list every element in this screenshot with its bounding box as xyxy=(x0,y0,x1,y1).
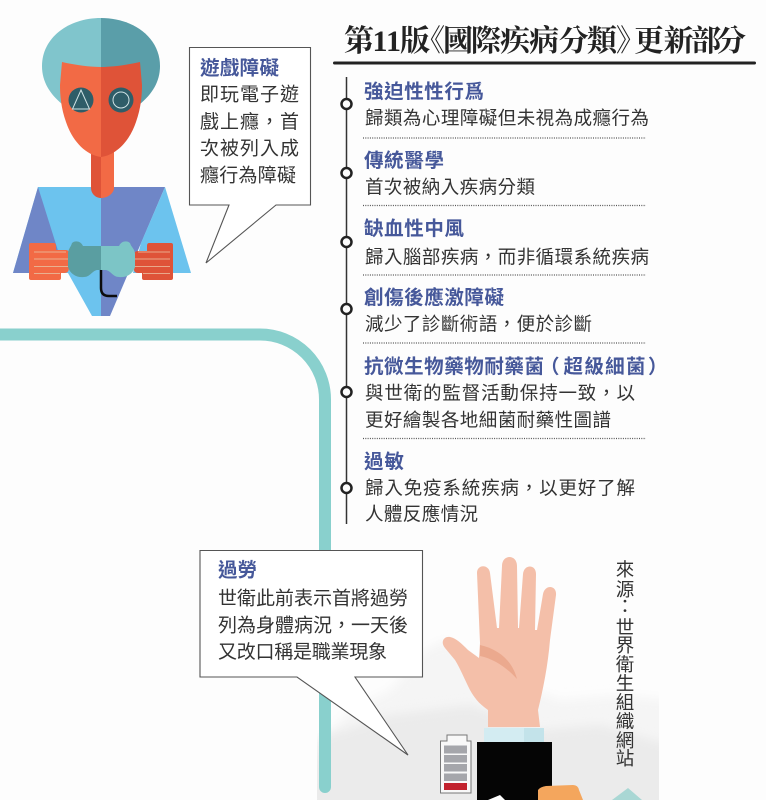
timeline xyxy=(342,77,352,524)
item: allergy: 人體反應情況 xyxy=(365,504,478,524)
item: allergy: 歸入免疫系統疾病，以更好了解 xyxy=(365,478,635,498)
hair xyxy=(42,18,160,104)
source credit: 織 xyxy=(616,711,634,732)
source credit: 界 xyxy=(616,635,634,656)
right hand xyxy=(134,243,173,280)
item: antimicrobial resistance: （ xyxy=(540,356,560,378)
callout text: 次被列入成 xyxy=(200,138,299,160)
eye: circle xyxy=(108,88,134,112)
title: 更 xyxy=(634,25,664,58)
title: 版 xyxy=(400,25,430,58)
shirt cuff xyxy=(484,728,544,742)
title: 國 xyxy=(443,25,473,58)
title: 類 xyxy=(587,25,619,58)
neck xyxy=(91,150,114,198)
title: 際 xyxy=(471,25,503,58)
title: 1 xyxy=(372,25,388,58)
callout text: 戲上癮，首 xyxy=(200,111,299,133)
item: antimicrobial resistance: 超級細菌 xyxy=(564,356,646,378)
item: PTSD: 減少了診斷術語，便於診斷 xyxy=(365,314,592,334)
arm sleeve xyxy=(477,742,552,800)
item: PTSD: 創傷後應激障礙 xyxy=(364,286,504,309)
callout text: 又改口稱是職業現象 xyxy=(218,641,387,663)
item: ischemic stroke: 缺血性中風 xyxy=(364,218,464,240)
heading: burnout: 過勞 xyxy=(218,560,257,582)
eye: triangle xyxy=(68,88,94,112)
item: antimicrobial resistance: 抗微生物藥物耐藥菌 xyxy=(364,355,544,378)
game controller xyxy=(68,241,135,277)
item: traditional medicine: 傳統醫學 xyxy=(364,150,444,172)
item: allergy: 過敏 xyxy=(364,451,404,473)
title: 》 xyxy=(616,25,646,58)
icon: low battery xyxy=(440,735,471,793)
source credit: 來 xyxy=(616,559,634,580)
source credit: 網 xyxy=(616,730,634,751)
source credit: 組 xyxy=(616,692,634,713)
callout text xyxy=(218,588,408,663)
grey brush background xyxy=(317,694,659,800)
item: PTSD xyxy=(364,286,592,334)
teal connector line xyxy=(0,334,325,787)
title: 新 xyxy=(664,25,694,58)
source credit: 源 xyxy=(616,579,634,600)
title rule xyxy=(333,62,756,64)
title: 分 xyxy=(558,25,588,58)
item: antimicrobial resistance: ） xyxy=(648,356,668,378)
title: 分 xyxy=(716,25,746,58)
source credit: 生 xyxy=(616,673,634,694)
hand xyxy=(443,557,556,727)
source credit: 衛 xyxy=(616,654,634,675)
item: antimicrobial resistance: 更好繪製各地細菌耐藥性圖譜 xyxy=(365,410,611,430)
illustration: raised hand xyxy=(443,557,642,800)
source credit: 世 xyxy=(616,617,634,638)
left hand xyxy=(29,243,69,280)
title: 1 xyxy=(386,25,401,58)
item: OCD: 強迫性性行爲 xyxy=(364,81,484,103)
cable xyxy=(101,270,117,296)
body xyxy=(13,187,191,316)
callout text: 即玩電子遊 xyxy=(200,84,299,106)
teal shape xyxy=(612,788,642,800)
heading: gaming disorder: 遊戲障礙 xyxy=(200,56,279,80)
callout text: 癮行為障礙 xyxy=(200,164,296,186)
callout text: 世衛此前表示首將過勞 xyxy=(218,588,408,610)
item: OCD xyxy=(364,81,649,128)
item: traditional medicine: 首次被納入疾病分類 xyxy=(365,176,535,198)
callout: gaming disorder xyxy=(190,48,310,263)
face xyxy=(60,62,142,157)
source credit: ： xyxy=(616,596,634,617)
callout: burnout xyxy=(200,550,422,755)
item: antimicrobial resistance: 與世衛的監督活動保持一致，以 xyxy=(365,382,635,404)
white shape at sleeve xyxy=(488,795,505,800)
illustration: gamer figure xyxy=(13,18,191,316)
title: 部 xyxy=(691,25,721,58)
title: 病 xyxy=(529,25,559,58)
item: OCD: 歸類為心理障礙但未視為成癮行為 xyxy=(365,108,649,128)
title: 《 xyxy=(415,25,445,58)
orange envelope shape xyxy=(538,785,583,800)
title: 疾 xyxy=(500,25,532,58)
item: ischemic stroke xyxy=(364,218,649,268)
palm crease xyxy=(480,645,517,679)
callout text xyxy=(200,84,299,186)
title: 第 xyxy=(344,25,374,58)
item: allergy xyxy=(364,451,635,524)
source credit: 站 xyxy=(616,748,634,769)
item: ischemic stroke: 歸入腦部疾病，而非循環系統疾病 xyxy=(365,246,649,268)
item: traditional medicine xyxy=(364,150,535,198)
callout text: 列為身體病況，一天後 xyxy=(218,614,408,636)
item: antimicrobial resistance xyxy=(364,355,668,430)
